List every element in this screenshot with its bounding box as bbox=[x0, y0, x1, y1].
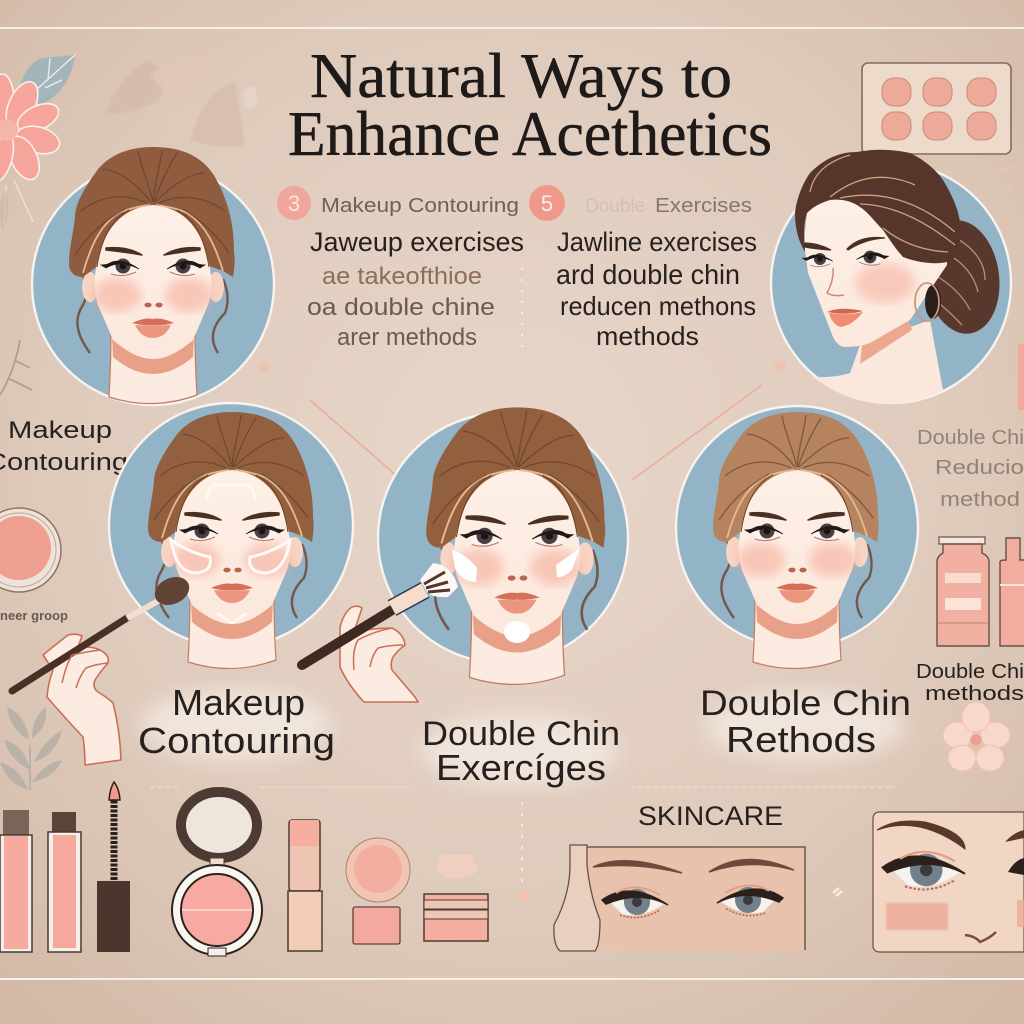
number badge 3: 3 bbox=[288, 191, 300, 216]
lipstick 1 bbox=[0, 810, 32, 952]
decorative flower, right bbox=[943, 702, 1010, 771]
text block: makeup contouring: Makeup Contouring bbox=[321, 195, 519, 217]
decorative leaf, left bbox=[0, 707, 62, 790]
text block: jawline exercises: methods bbox=[596, 321, 699, 351]
text block: makeup contouring bbox=[307, 195, 524, 351]
bottle bbox=[554, 845, 600, 951]
side bar accent bbox=[1018, 344, 1024, 410]
side label: makeup contouring bbox=[0, 417, 128, 476]
text block: makeup contouring: ae takeofthioe bbox=[322, 263, 482, 290]
title: Enhance Acethetics bbox=[288, 98, 772, 169]
skincare label: SKINCARE bbox=[638, 801, 783, 831]
text block: jawline exercises: reducen methons bbox=[560, 291, 756, 321]
caption: double chin exercises: Double Chin bbox=[422, 715, 620, 753]
text block: jawline exercises: Jawline exercises bbox=[557, 227, 757, 257]
text block: jawline exercises: ard double chin bbox=[556, 259, 740, 290]
number badge 5 bbox=[529, 185, 565, 221]
lip gloss bbox=[48, 812, 81, 952]
caption: double chin exercises bbox=[422, 715, 620, 788]
side label: double chin methods: methods bbox=[925, 683, 1024, 705]
text block: jawline exercises: Exercises bbox=[655, 195, 752, 217]
jars, right bbox=[937, 537, 1024, 646]
side label: double chin reduction: method bbox=[940, 489, 1020, 511]
title bbox=[288, 40, 772, 169]
caption: makeup contouring: Contouring bbox=[138, 720, 335, 761]
cream box bbox=[424, 855, 488, 941]
foundation tube bbox=[288, 820, 322, 951]
mascara bbox=[97, 782, 130, 952]
portrait 4: cheek application bbox=[378, 407, 628, 684]
title: Natural Ways to bbox=[310, 40, 732, 111]
close-up face panel bbox=[873, 812, 1024, 952]
caption: makeup contouring: Makeup bbox=[172, 682, 305, 723]
text block: jawline exercises bbox=[556, 195, 757, 351]
blush compact bbox=[172, 792, 262, 956]
caption: double chin exercises: Exercíges bbox=[436, 747, 606, 788]
connector lines bbox=[150, 268, 895, 902]
soft glow behind captions bbox=[141, 689, 905, 786]
palette, top right bbox=[862, 63, 1011, 154]
caption: makeup contouring bbox=[138, 682, 335, 761]
side label: double chin methods: Double Chi bbox=[916, 661, 1024, 683]
powder pot bbox=[346, 838, 410, 944]
text block: jawline exercises: Double bbox=[585, 196, 645, 217]
portrait 1 bbox=[32, 147, 274, 405]
sparkle mark bbox=[833, 888, 842, 896]
decorative flower and leaves, top left bbox=[0, 55, 257, 230]
portrait 5: lighter hair bbox=[676, 406, 918, 669]
side label: double chin methods bbox=[916, 661, 1024, 705]
portrait 2: side-facing with bun bbox=[771, 150, 1011, 404]
small blurred compact label: neer groop bbox=[0, 608, 68, 623]
decorative branch, left bbox=[0, 340, 32, 395]
number badge 5: 5 bbox=[541, 191, 553, 216]
side label: double chin reduction: Double Chi bbox=[917, 427, 1024, 449]
skincare eye panel bbox=[587, 847, 805, 950]
caption: double chin methods: Double Chin bbox=[700, 684, 911, 723]
caption: double chin methods bbox=[700, 684, 911, 760]
portrait 3: contouring bbox=[109, 403, 353, 669]
brush and hand, left bbox=[12, 572, 194, 765]
side label: double chin reduction bbox=[917, 427, 1024, 511]
text block: makeup contouring: oa double chine bbox=[307, 294, 495, 321]
text block: makeup contouring: Jaweup exercises bbox=[310, 227, 524, 257]
blush compact, left bbox=[0, 508, 61, 592]
text block: makeup contouring: arer methods bbox=[337, 324, 477, 351]
number badge 3 bbox=[277, 186, 311, 220]
brush and hand, centre bbox=[302, 563, 458, 702]
side label: double chin reduction: Reducio bbox=[935, 457, 1024, 479]
decorative sparkles, top right bbox=[812, 75, 1016, 192]
side label: makeup contouring: Makeup bbox=[8, 417, 112, 444]
caption: double chin methods: Rethods bbox=[726, 719, 876, 760]
